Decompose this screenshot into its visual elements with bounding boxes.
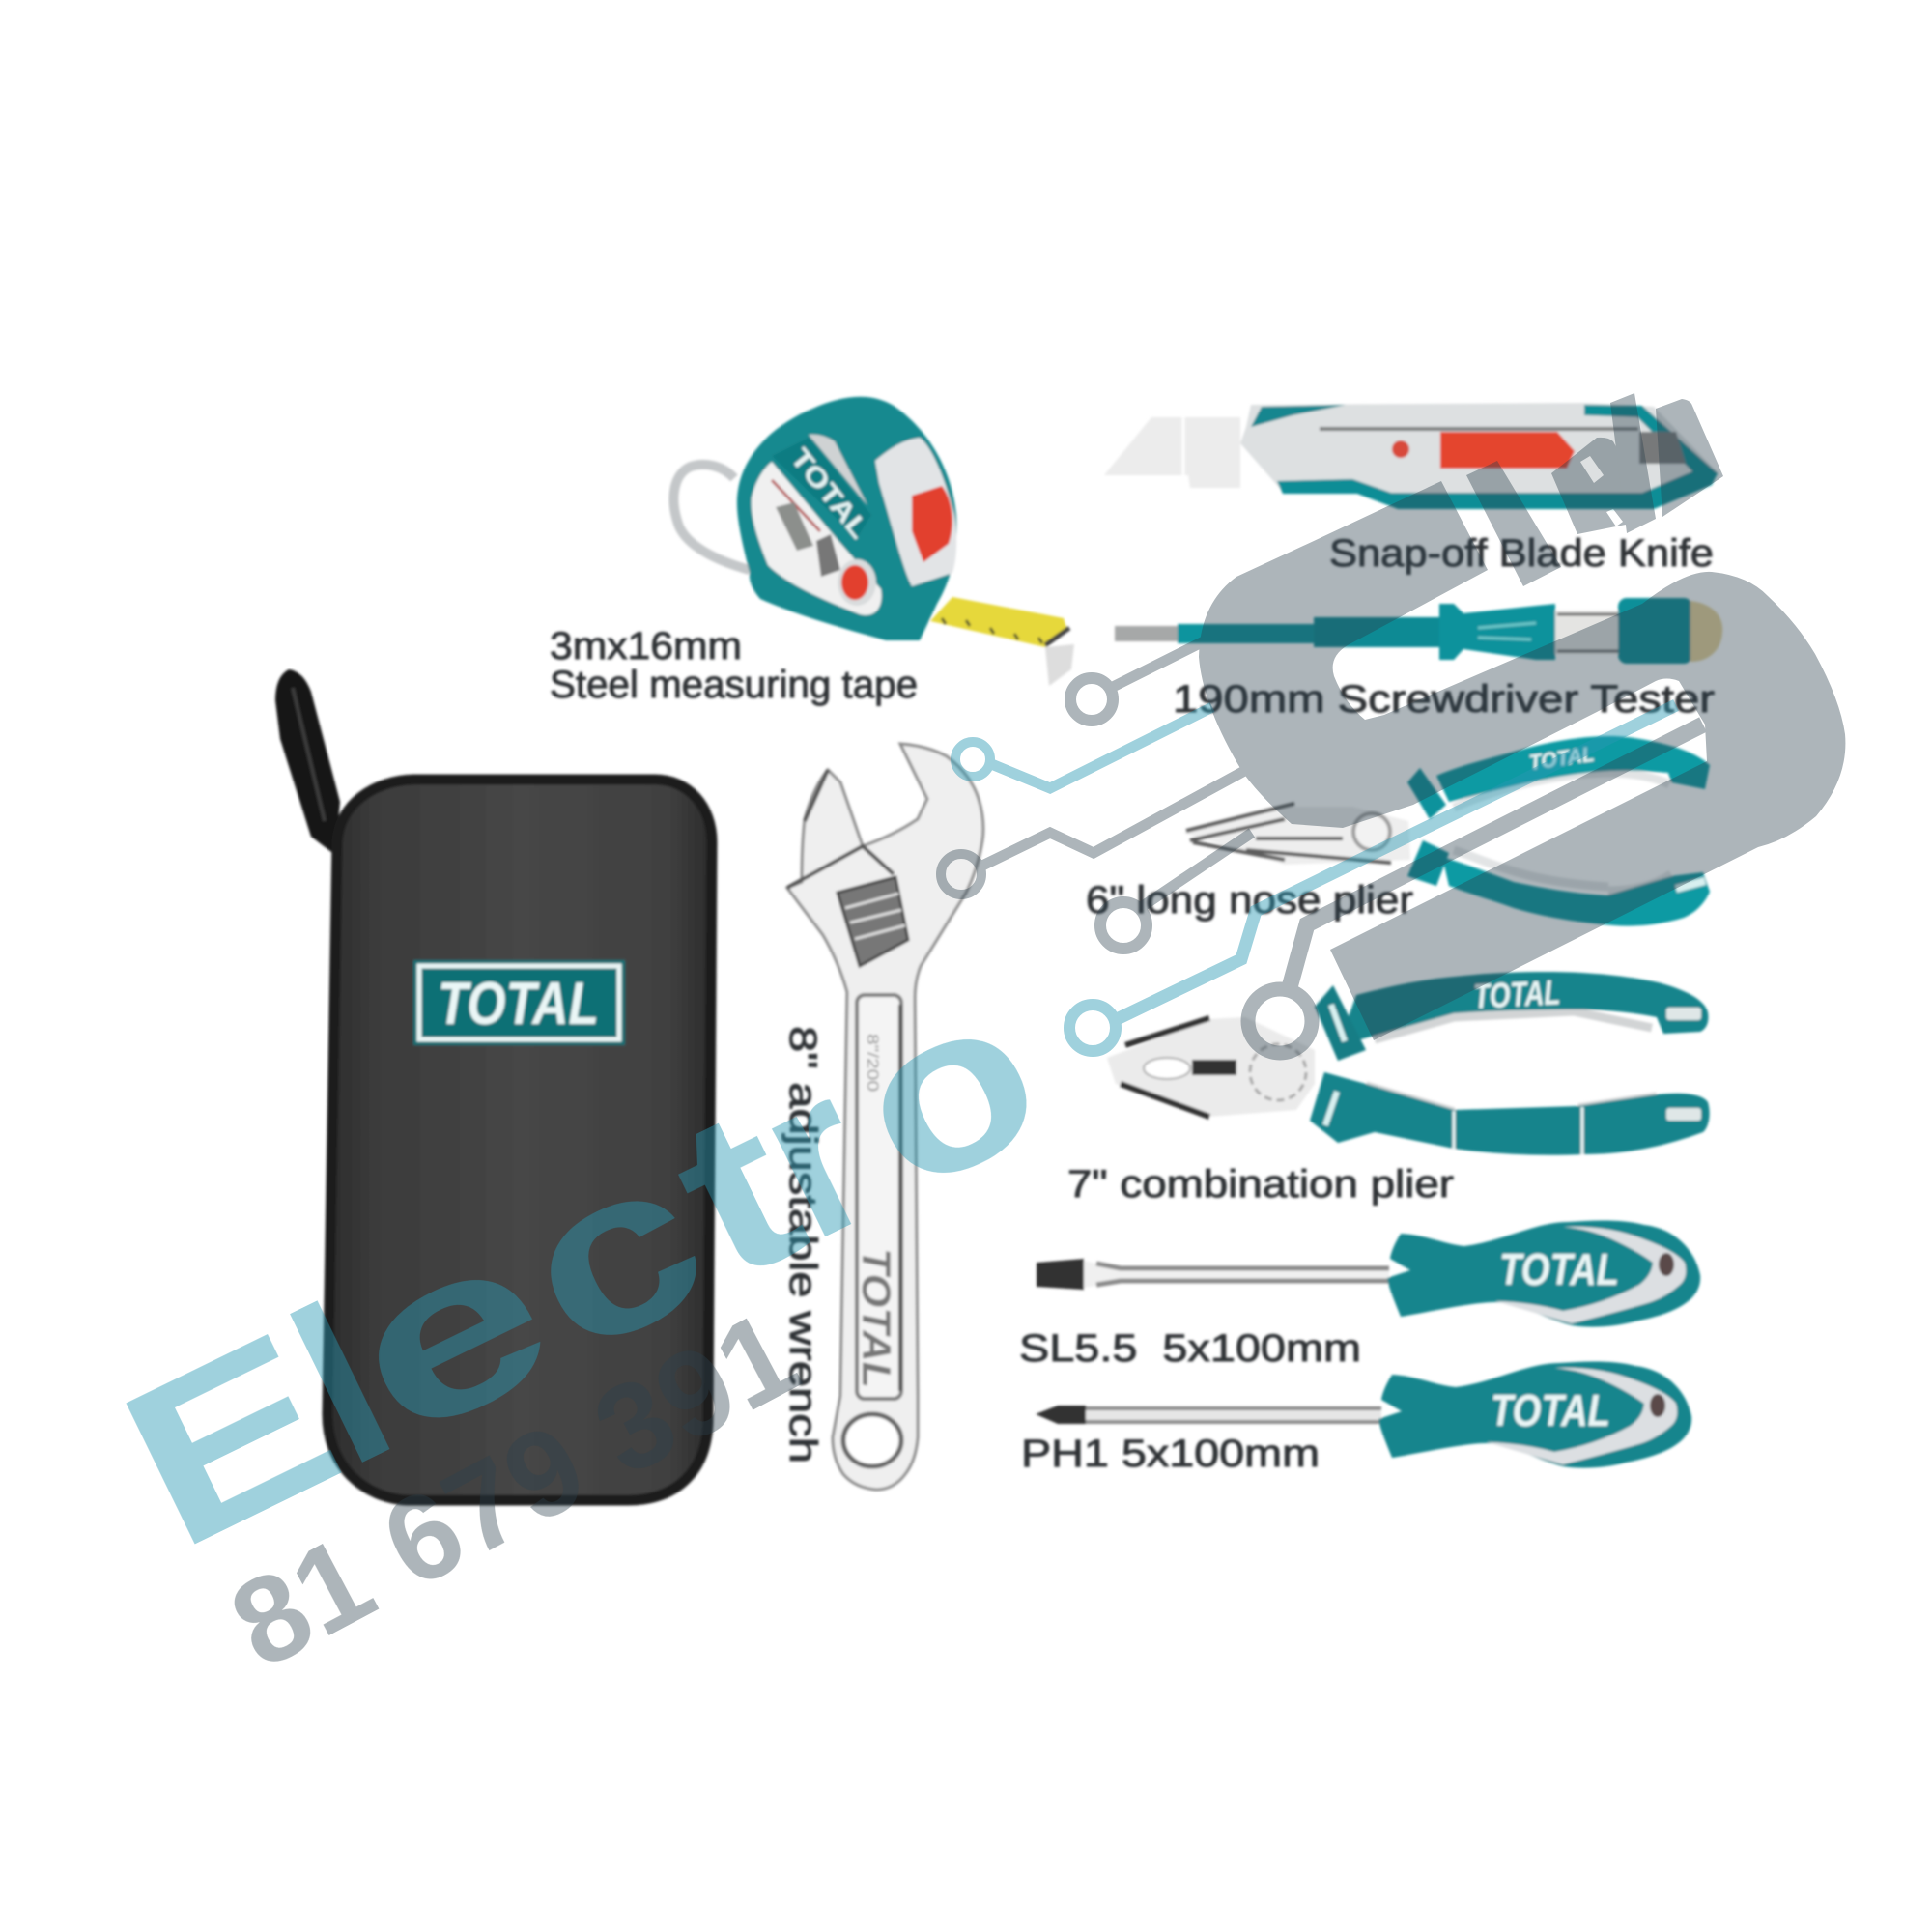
label: combination plier: 7" combination plier (1067, 1163, 1454, 1206)
label: phillips screwdriver: PH1 5x100mm (1021, 1433, 1320, 1475)
wrench worm gear (838, 877, 908, 966)
slotted logo: TOTAL (1499, 1244, 1619, 1294)
watermark: Electro wordmark (87, 940, 1077, 1597)
snap-off knife (1104, 403, 1718, 509)
slotted handle silver inset (1495, 1227, 1686, 1323)
long nose upper handle (1436, 736, 1710, 802)
knife slider (1440, 432, 1575, 469)
long nose jaw (1183, 804, 1410, 865)
watermark: Electro wordmark: l (258, 1257, 425, 1514)
watermark: teal layer (87, 705, 1676, 1597)
tester shaft (1178, 624, 1314, 643)
tape total band (772, 438, 875, 544)
watermark: letter b (1656, 399, 1723, 517)
watermark: Electro wordmark: E (87, 1283, 374, 1597)
slotted hole (1659, 1253, 1674, 1276)
pouch body (327, 780, 712, 1500)
long nose lower flange (1407, 840, 1449, 886)
watermark: grey circuit traces (941, 639, 1703, 1053)
phillips screwdriver (1036, 1361, 1691, 1468)
tape total band: TOTAL (784, 442, 875, 544)
label: tape (550, 625, 918, 706)
wrench ring (843, 1414, 901, 1466)
pouch logo: TOTAL (438, 971, 599, 1037)
phillips logo: TOTAL (1491, 1385, 1610, 1435)
combination silver strips (1366, 1011, 1657, 1112)
tape measure (673, 397, 1074, 686)
combination plier (1107, 972, 1710, 1155)
tape red dot (838, 559, 876, 606)
watermark: Electro wordmark: c (484, 1103, 742, 1404)
watermark: teal circuit traces (955, 705, 1676, 1051)
tape hook (1045, 644, 1074, 686)
watermark: grey logo blob (1199, 481, 1845, 1040)
tape silver panel (875, 438, 956, 586)
watermark: letter l (1466, 461, 1561, 586)
knife red dot (1392, 440, 1409, 458)
long nose logo: TOTAL (1527, 742, 1596, 775)
screwdriver tester (1115, 598, 1722, 664)
phillips tip (1036, 1406, 1086, 1424)
wrench handle recess (857, 995, 901, 1399)
knife window (1639, 432, 1686, 464)
tester cap (1618, 598, 1692, 664)
long nose plier (1183, 736, 1710, 926)
pouch logo (413, 960, 625, 1045)
watermark: Electro wordmark: o (817, 940, 1077, 1240)
wrench sliding jaw edge (787, 770, 894, 888)
watermark: grey layer (210, 393, 1845, 1694)
combination upper handle (1338, 972, 1708, 1046)
tester handle (1439, 604, 1555, 660)
long nose upper flange (1407, 768, 1446, 819)
slotted tip (1037, 1259, 1084, 1290)
knife body (1240, 403, 1717, 507)
slotted handle (1387, 1220, 1700, 1327)
knife teal trim (1251, 405, 1346, 427)
phillips handle (1378, 1361, 1691, 1468)
tape red button (912, 486, 952, 562)
watermark: Electro wordmark: t (638, 1057, 837, 1328)
adjustable wrench (787, 744, 983, 1490)
wrench body (787, 744, 983, 1490)
watermark: Electro wordmark: e (310, 1178, 588, 1488)
watermark: letter stem (1610, 393, 1656, 533)
tester window (1555, 611, 1618, 654)
combination upper flange (1315, 985, 1366, 1061)
wrench size text: 8"/200 (864, 1034, 882, 1092)
phillips handle silver inset (1487, 1368, 1677, 1464)
label: knife: Snap-off Blade Knife (1329, 532, 1714, 575)
knife blade (1104, 417, 1240, 488)
tape case (737, 397, 956, 640)
watermark: letter a (1551, 438, 1655, 534)
label: wrench: 8" adjustable wrench (781, 1026, 824, 1463)
combination upper end (1666, 1008, 1701, 1020)
tape strap loop (673, 465, 750, 570)
tester tip (1115, 626, 1178, 641)
tester end (1690, 601, 1722, 662)
watermark: phone number: 81 679 391 (210, 1285, 818, 1694)
tape white label (752, 462, 882, 615)
wrench logo: TOTAL (854, 1248, 899, 1388)
pouch strap (275, 669, 340, 855)
slotted shaft (1084, 1261, 1389, 1288)
combination lower handle (1310, 1072, 1710, 1155)
phillips hole (1650, 1394, 1665, 1417)
yellow tape blade (930, 597, 1067, 647)
tape grey wedge (809, 435, 867, 505)
slotted screwdriver (1037, 1220, 1700, 1327)
long nose silver (1454, 773, 1671, 891)
combination lower end (1666, 1108, 1701, 1121)
label: long nose plier: 6" long nose plier (1086, 879, 1413, 922)
label: tape: Steel measuring tape (550, 664, 918, 706)
long nose lower handle (1442, 857, 1710, 926)
combination jaw (1107, 1017, 1315, 1117)
pouch with strap and logo (275, 669, 712, 1500)
label: tester: 190mm Screwdriver Tester (1173, 678, 1715, 721)
label: tape: 3mx16mm (550, 625, 742, 668)
label: slotted screwdriver: SL5.5 5x100mm (1019, 1327, 1361, 1370)
watermark: Electro wordmark: r (722, 1022, 907, 1288)
combination logo: TOTAL (1472, 972, 1561, 1016)
phillips shaft (1086, 1406, 1381, 1423)
tools artwork (275, 397, 1722, 1500)
